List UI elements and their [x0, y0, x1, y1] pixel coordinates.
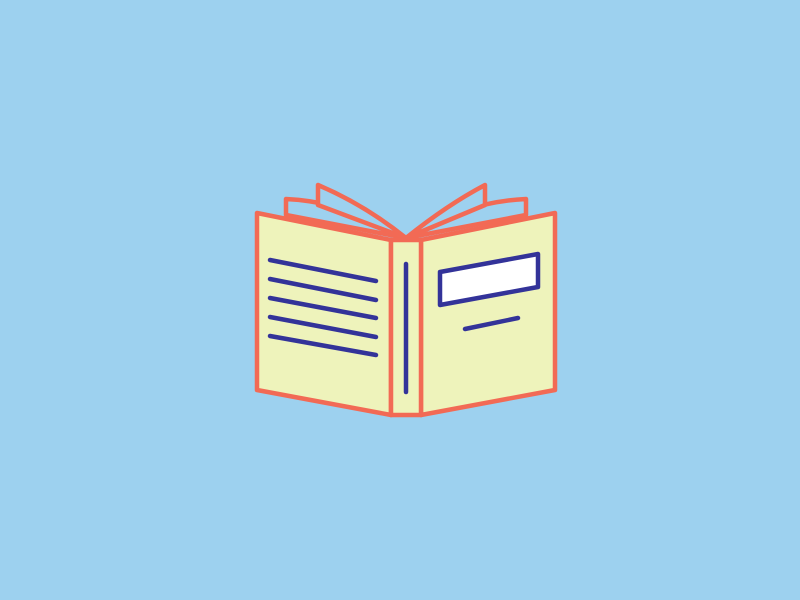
- right cover: [421, 213, 555, 415]
- spine: [391, 240, 421, 415]
- title box on right cover: [440, 254, 538, 305]
- text lines: [270, 260, 518, 392]
- left cover: [257, 213, 391, 415]
- back pages: [286, 185, 526, 238]
